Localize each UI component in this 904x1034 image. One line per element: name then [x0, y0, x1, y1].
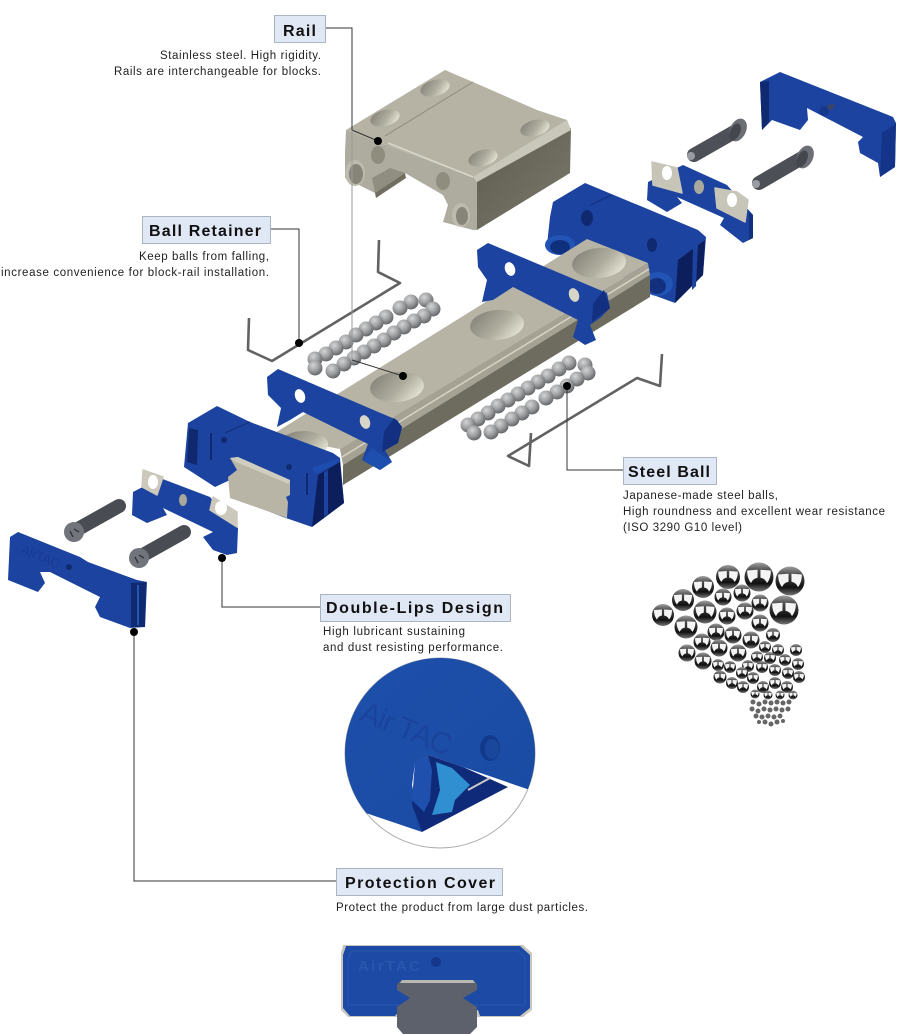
- front blue end block: [184, 406, 344, 527]
- text: Ball Retainer description: Keep balls from falling,: [139, 251, 269, 263]
- text: Steel Ball description: (ISO 3290 G10 level): [623, 522, 742, 534]
- label: Steel Ball: Steel Ball: [628, 464, 710, 481]
- detail circle: double-lip close-up: [344, 658, 536, 848]
- label: Steel Ball: [624, 458, 716, 484]
- rear screws: [687, 116, 817, 188]
- label: Rail: Rail: [283, 23, 316, 40]
- rail hole: front: [369, 370, 425, 404]
- leader lines: [130, 28, 623, 881]
- text: Rail description: Rails are interchangeable for blocks.: [114, 66, 321, 78]
- text: Ball Retainer description: [1, 251, 269, 279]
- detail circle: double-lip close-up: Air TAC: [355, 696, 457, 762]
- steel balls: upper row: [308, 292, 440, 378]
- rear double-lip plate: [647, 162, 753, 243]
- text: Ball Retainer description: increase convenience for block-rail installation.: [1, 267, 269, 279]
- text: Double-Lips description: [323, 626, 503, 654]
- rail hole: middle: [469, 308, 525, 342]
- text: Double-Lips description: High lubricant sustaining: [323, 626, 465, 638]
- steel balls: lower row: [460, 356, 596, 440]
- rear cover: [760, 72, 896, 177]
- label: Double-Lips Design: [320, 594, 510, 622]
- wire: upper ball retainer: [248, 240, 400, 361]
- text: Protection Cover description: Protect the product from large dust particles.: [336, 902, 588, 914]
- label: Double-Lips Design: Double-Lips Design: [326, 600, 503, 617]
- rear blue end block: [545, 183, 706, 303]
- grey block: rail carriage body: [345, 70, 571, 230]
- label: Ball Retainer: Ball Retainer: [149, 223, 261, 240]
- text: Rail description: Stainless steel. High rigidity.: [160, 50, 321, 62]
- rail hole: rear: [571, 246, 627, 280]
- rail profile: [397, 980, 477, 1034]
- front protection cover: [8, 532, 147, 628]
- rail: [270, 239, 650, 485]
- label: Ball Retainer: [142, 216, 270, 244]
- front ball retainer clip: [267, 369, 402, 470]
- back ball retainer clip: [477, 243, 610, 345]
- label: Rail: [274, 16, 326, 42]
- protection cover front view: [341, 945, 532, 1034]
- text: Rail description: [114, 50, 321, 78]
- text: Steel Ball description: Japanese-made steel balls,: [623, 490, 778, 502]
- label: Protection Cover: [336, 868, 502, 896]
- front protection cover: AirTAC: [19, 542, 62, 571]
- front screws: [64, 506, 184, 568]
- wire: lower ball retainer: [508, 354, 662, 466]
- text: Steel Ball description: [623, 490, 885, 534]
- label: Protection Cover: Protection Cover: [345, 875, 495, 892]
- text: Steel Ball description: High roundness and excellent wear resistance: [623, 506, 885, 518]
- text: Double-Lips description: and dust resisting performance.: [323, 642, 503, 654]
- front double-lip plate: [132, 470, 238, 555]
- protection cover front view: AirTAC: [358, 958, 420, 975]
- steel balls photo: [652, 562, 805, 726]
- grey carriage insert: [228, 457, 290, 518]
